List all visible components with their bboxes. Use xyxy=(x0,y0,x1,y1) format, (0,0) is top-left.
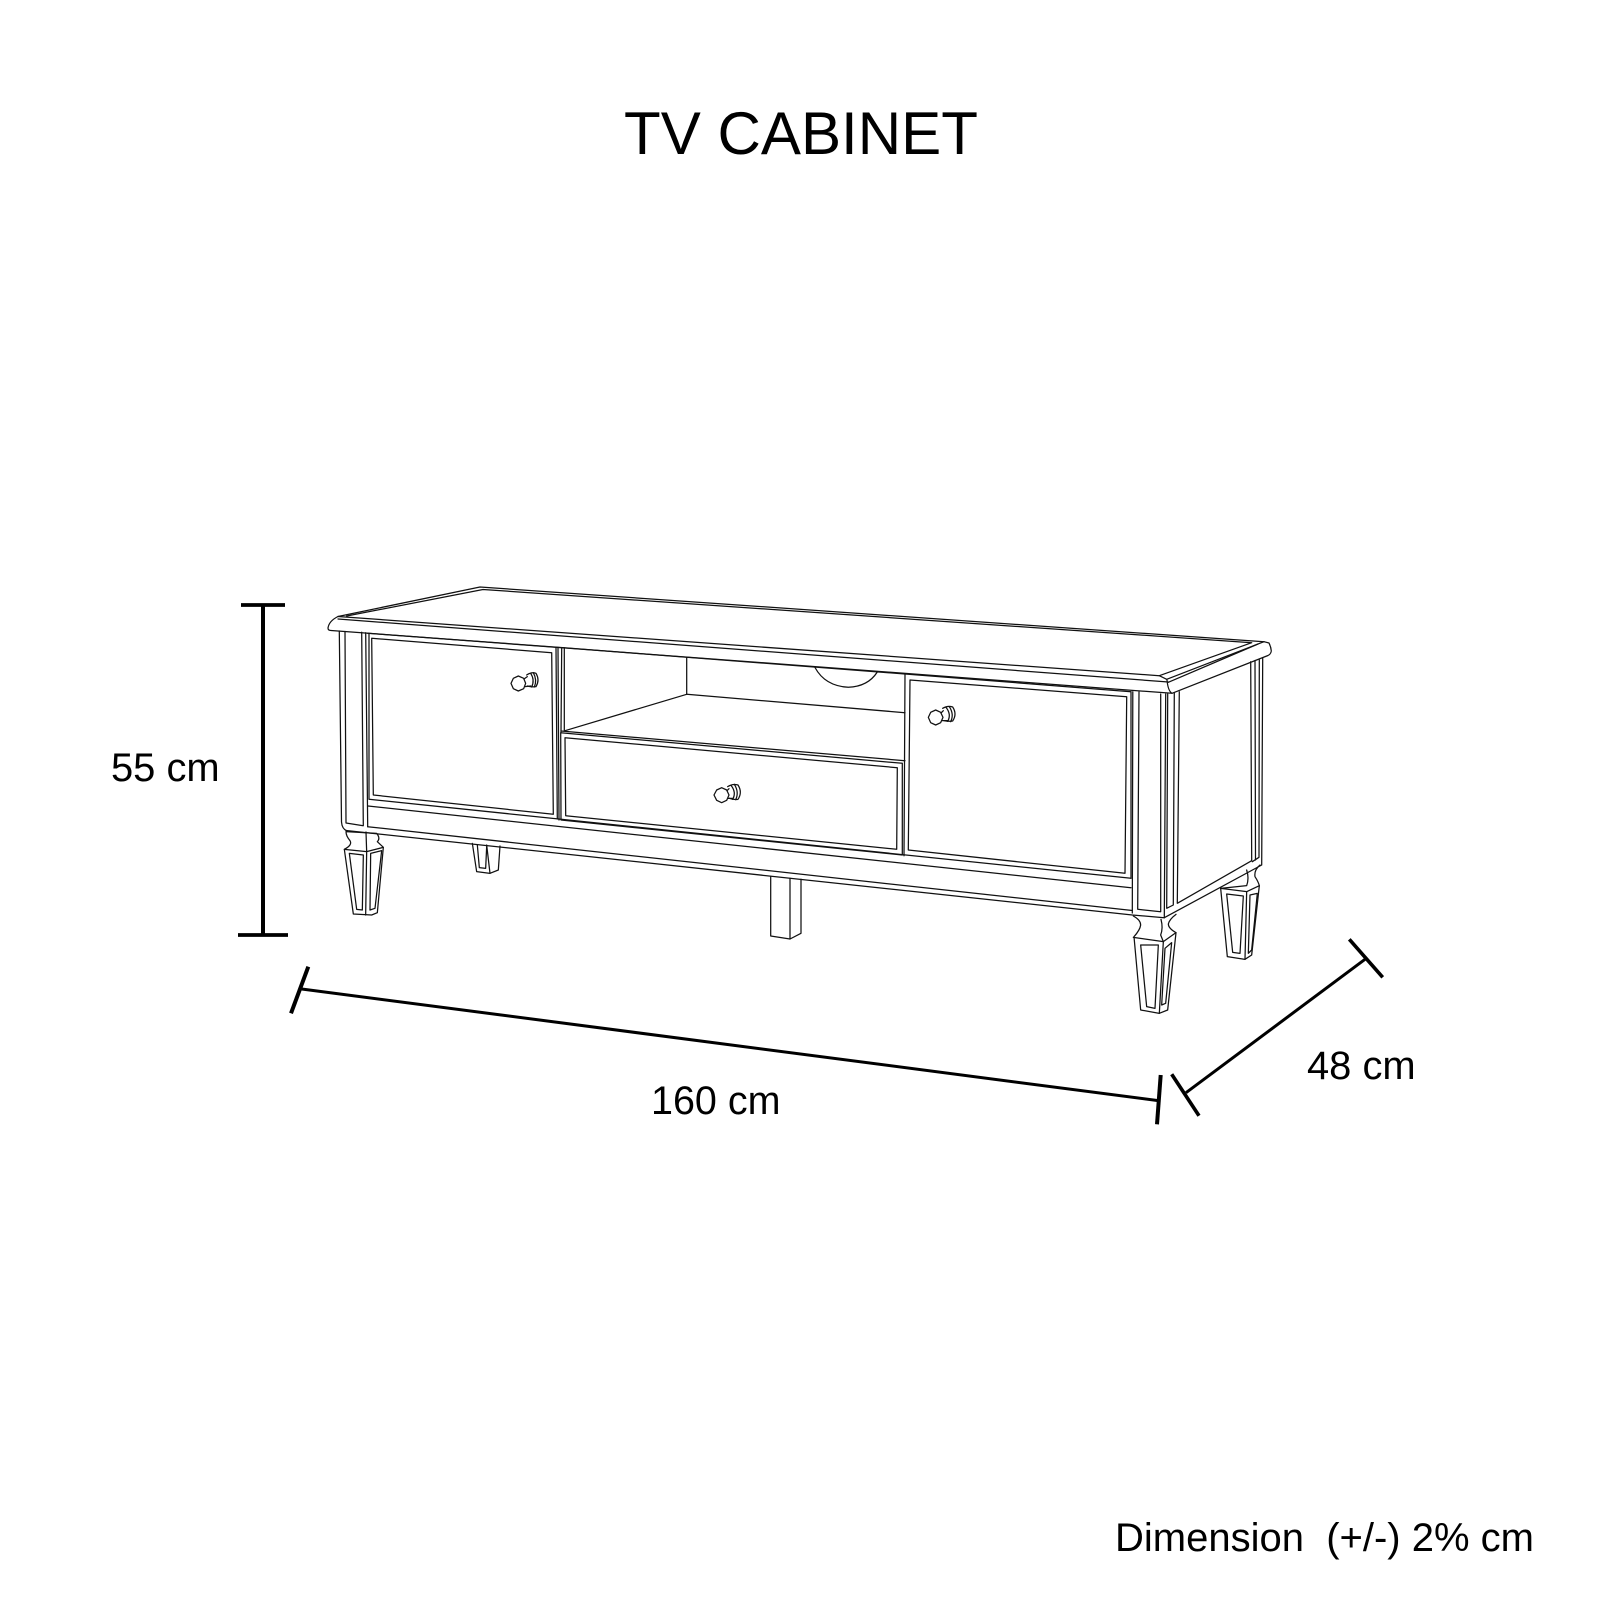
knob: drawer xyxy=(714,784,740,803)
open shelf niche xyxy=(561,648,905,733)
title: TV CABINET xyxy=(624,100,978,167)
label: 55 cm: 55 cm xyxy=(111,746,220,790)
right corner post and side panel xyxy=(1132,658,1263,918)
front right leg xyxy=(1133,914,1176,1013)
dimension: depth 48 cm xyxy=(1172,939,1383,1116)
rear right leg xyxy=(1221,865,1260,959)
label: 160 cm: 160 cm xyxy=(651,1079,781,1123)
footnote: tolerance: Dimension (+/-) 2% cm xyxy=(1115,1516,1534,1560)
label: 48 cm: 48 cm xyxy=(1307,1044,1416,1088)
rear center leg xyxy=(771,877,801,939)
front left leg xyxy=(344,832,383,915)
knob: right door xyxy=(928,706,955,725)
dimension: width 160 cm xyxy=(291,967,1161,1124)
cabinet top slab xyxy=(328,587,1271,693)
drawer xyxy=(561,731,905,855)
right door xyxy=(904,674,1131,878)
left post and frame xyxy=(339,631,1164,918)
dimension: height 55 cm xyxy=(238,605,288,935)
left door xyxy=(369,634,1131,878)
knob: left door xyxy=(511,673,538,691)
illustration: TV cabinet xyxy=(328,587,1271,1013)
rear left leg xyxy=(472,843,500,873)
